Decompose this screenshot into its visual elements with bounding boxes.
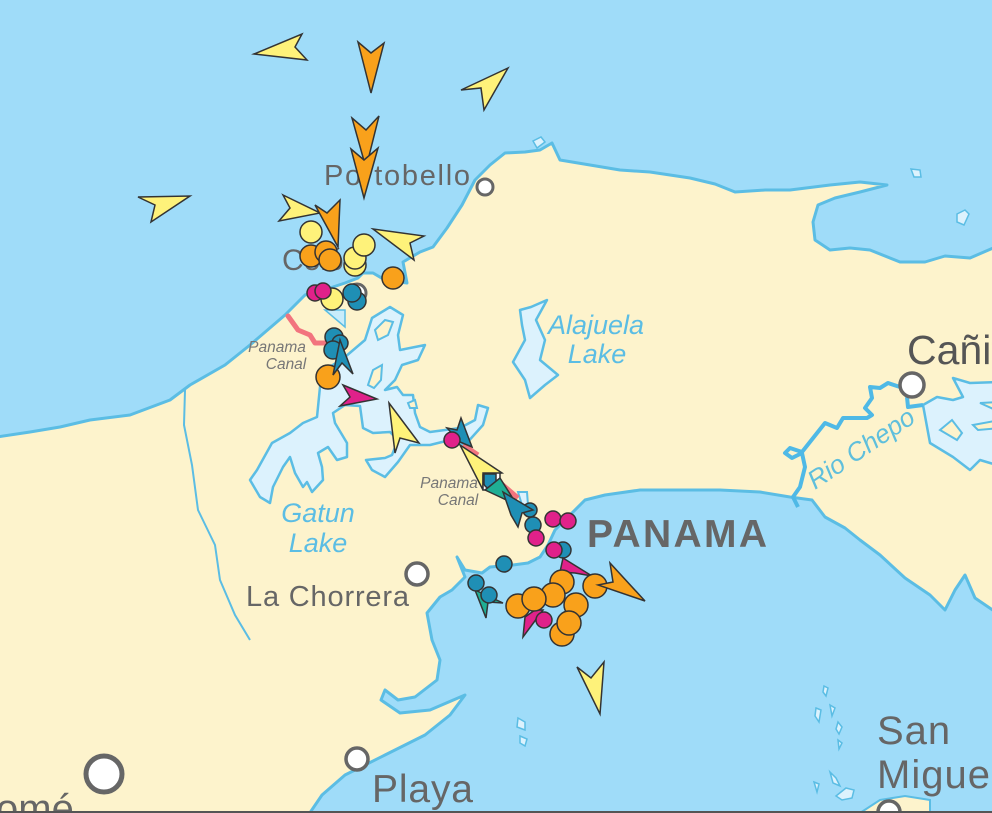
ships: Gatun Lake — [316, 328, 472, 453]
label: Panama Canal south: Canal — [438, 492, 479, 509]
eastern lake islands — [940, 402, 992, 440]
San Miguel island land — [860, 796, 930, 813]
label: Gatun Lake: Lake — [289, 528, 347, 558]
label: Panama Canal north: Panama — [248, 339, 306, 356]
eastern lake — [923, 378, 992, 470]
label: San Miguel: San — [877, 709, 951, 753]
Colon bay inlet — [325, 310, 345, 327]
city markers — [86, 179, 924, 813]
western river — [184, 390, 250, 640]
Rio Chepo river — [785, 383, 923, 507]
lake islands — [368, 320, 417, 408]
label: La Chorrera: La Chorrera — [246, 581, 410, 613]
canal channel inlet — [518, 492, 528, 505]
label: PANAMA: PANAMA — [587, 513, 767, 556]
Gatun Lake — [250, 307, 488, 503]
label: Playa: Playa — [372, 768, 473, 811]
label: Gatun Lake: Gatun — [281, 498, 355, 528]
label: Colon: Colón — [282, 244, 360, 277]
canal route line north — [288, 316, 330, 343]
label: Panama Canal north: Canal — [266, 356, 307, 373]
ships: Caribbean approach — [138, 34, 508, 310]
ships: Pacific approach — [468, 558, 645, 714]
label: Alajuela Lake: Lake — [568, 339, 626, 369]
label: Alajuela Lake: Alajuela — [546, 310, 644, 340]
label: Panama Canal south: Panama — [420, 475, 478, 492]
canal route line south — [463, 445, 518, 498]
label: Rio Chepo: Rio Chepo — [802, 401, 920, 495]
label: Portobello: Portobello — [324, 160, 470, 192]
Alajuela Lake shape — [513, 300, 558, 398]
coastal islands — [517, 137, 969, 800]
ships: southern canal — [460, 445, 576, 572]
